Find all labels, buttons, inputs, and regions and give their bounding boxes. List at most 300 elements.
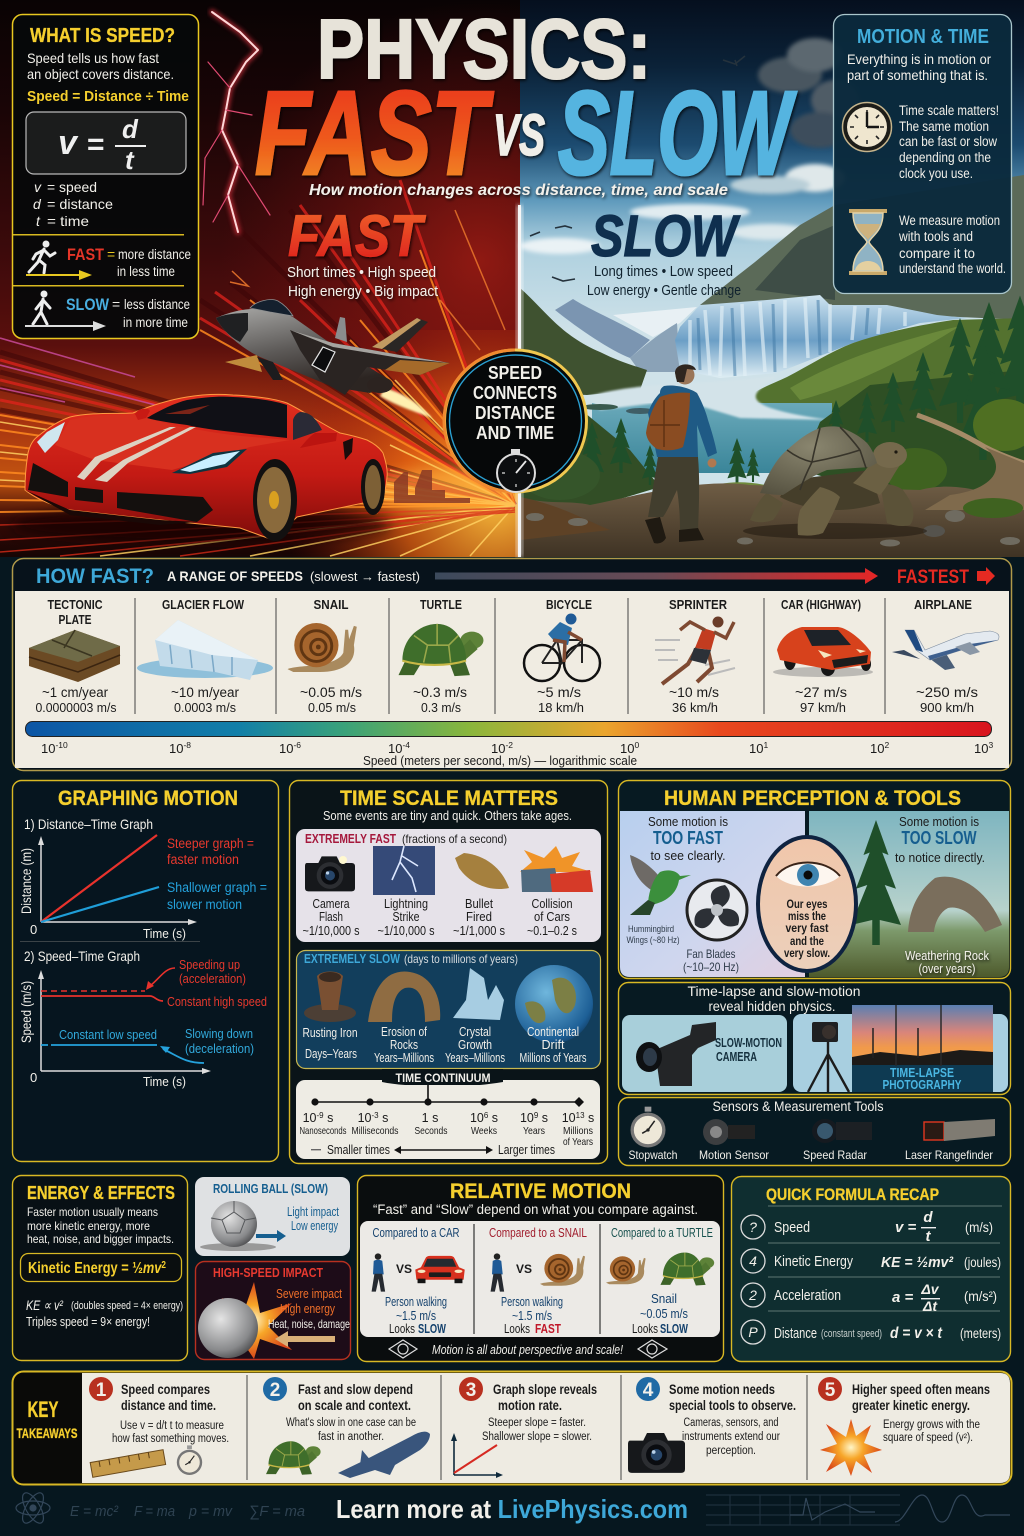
arrow <box>275 1331 335 1347</box>
icon: slow walker <box>25 290 106 331</box>
icon: earth <box>515 965 593 1043</box>
intro text: part of something that is. <box>847 67 988 83</box>
time labels: 10 <box>470 1111 484 1125</box>
divider line between fast and slow <box>516 205 523 557</box>
giant tortoise <box>743 426 927 539</box>
time labels: s <box>538 1111 548 1125</box>
time labels: s <box>379 1111 388 1125</box>
fast summary <box>287 204 438 300</box>
axis tick labels: 10 <box>974 741 988 756</box>
text: hidden physics <box>688 983 860 1014</box>
item: airplane: AIRPLANE <box>914 597 972 612</box>
row: distance: P <box>748 1324 758 1340</box>
row: acceleration: Acceleration <box>774 1287 841 1304</box>
measure text <box>898 213 1006 276</box>
item: tectonic plate: TECTONIC <box>48 597 103 612</box>
smaller to larger arrow: Larger times <box>498 1143 555 1157</box>
comparison: turtle: ~0.05 m/s <box>640 1307 688 1321</box>
row: kinetic energy: 4 <box>749 1253 757 1269</box>
sub-panel: too slow: to notice directly. <box>895 850 985 865</box>
hero illustration: fast side <box>0 0 520 557</box>
takeaway 4: 4 <box>643 1380 654 1401</box>
shell <box>760 426 877 495</box>
icon: collision <box>520 846 593 892</box>
time labels: -9 <box>317 1111 324 1120</box>
item: turtle: 0.3 m/s <box>421 700 461 715</box>
lightning bolt <box>203 12 270 232</box>
panel: time-lapse and slow-motion <box>618 982 1010 1094</box>
right forest <box>800 370 1024 500</box>
row: acceleration: (m/s²) <box>964 1289 997 1304</box>
comparison: car: Person walking <box>385 1295 447 1309</box>
icon: turtle <box>266 1441 321 1475</box>
title word: vs: VS <box>493 103 545 168</box>
item: bicycle: BICYCLE <box>546 597 592 612</box>
panel: how fast range of speeds: (slowest → fastest) <box>310 570 420 584</box>
item: car highway: 97 km/h <box>800 700 846 715</box>
row: acceleration <box>741 1281 997 1314</box>
heading: TIME SCALE MATTERS <box>340 787 558 810</box>
time scale text: clock you use. <box>899 166 973 181</box>
slow definition: SLOW <box>66 295 110 314</box>
title word: slow: SLOW <box>558 67 797 200</box>
arrow <box>256 1230 286 1242</box>
intro text <box>847 51 991 83</box>
row: distance <box>741 1320 1001 1344</box>
comparison: car: ~1.5 m/s <box>396 1309 436 1323</box>
hiker walking <box>645 364 717 543</box>
takeaway 4: Some motion needs <box>669 1382 775 1397</box>
sub-panel: time continuum: Weeks <box>471 1125 497 1137</box>
description: heat, noise, and bigger impacts. <box>27 1232 174 1246</box>
subheading: Some events are tiny and quick. Others take ages. <box>323 808 572 823</box>
comparison: snail <box>489 1225 587 1336</box>
card: slow-motion camera: SLOW-MOTION <box>715 1035 782 1050</box>
slow traits: Long times • Low speed <box>594 264 733 280</box>
note: constant high speed: Constant high speed <box>167 994 267 1009</box>
sub-panel: too fast: Fan Blades <box>686 947 736 961</box>
fast traits: Short times • High speed <box>287 265 436 281</box>
row: kinetic energy: KE = ½mv² <box>881 1254 954 1271</box>
time labels: 10 <box>303 1111 317 1125</box>
timeline <box>311 1085 584 1107</box>
item: glacier flow: ~10 m/year <box>171 685 239 700</box>
row: acceleration: 2 <box>748 1287 757 1303</box>
time scale text: can be fast or slow <box>899 134 997 149</box>
sub-panel: too fast: TOO FAST <box>653 828 723 848</box>
icon: stopwatch <box>497 449 535 492</box>
labels: Drift <box>542 1038 565 1052</box>
measure text: compare it to <box>899 246 975 261</box>
labels: Rusting Iron <box>302 1026 358 1040</box>
takeaway 2: Fast and slow depend <box>298 1382 413 1397</box>
takeaway 3: motion rate. <box>498 1398 562 1413</box>
note: constant low speed: Constant low speed <box>59 1027 157 1042</box>
comparison: snail: Compared to a SNAIL <box>489 1225 587 1240</box>
takeaway 5 <box>818 1377 990 1476</box>
row: distance: (meters) <box>960 1326 1001 1341</box>
chart: distance-time graph: Distance (m) <box>19 848 34 914</box>
panel: graphing motion <box>12 780 278 1162</box>
description: more kinetic energy, more <box>27 1219 150 1233</box>
variable legend: = speed <box>47 179 97 195</box>
far leg <box>880 483 913 526</box>
jet fighter <box>216 300 450 418</box>
axis tick labels: 10 <box>749 741 763 756</box>
tool: speed radar: Speed Radar <box>803 1148 867 1162</box>
row: speed: (m/s) <box>965 1220 993 1235</box>
axis tick labels <box>41 740 993 756</box>
row: distance: (constant speed) <box>821 1328 882 1340</box>
item: tectonic plate: PLATE <box>58 612 92 627</box>
sub-panel: extremely slow <box>296 950 600 1068</box>
takeaway 1: Use v = d/t t to measure <box>120 1420 224 1432</box>
item: airplane: ~250 m/s <box>916 685 978 700</box>
slow definition: less distance <box>124 297 190 312</box>
panel: time scale matters <box>290 780 608 1164</box>
comparison: turtle <box>606 1225 714 1336</box>
chart: distance-time graph: 0 <box>30 922 37 937</box>
icon: fast runner <box>26 240 92 280</box>
heading: TAKEAWAYS <box>16 1425 78 1441</box>
variable legend: = distance <box>47 196 113 212</box>
description: Faster motion usually means <box>27 1205 158 1219</box>
sub-panel: extremely fast <box>296 829 601 942</box>
note: shallower graph: slower motion <box>167 897 242 912</box>
proportionality note <box>26 1297 183 1329</box>
heading: RELATIVE MOTION <box>450 1180 631 1203</box>
sub-panel: extremely fast: EXTREMELY FAST <box>305 832 396 846</box>
comparison: car: Compared to a CAR <box>372 1225 460 1240</box>
sub-panel: too fast: Wings (~80 Hz) <box>626 935 680 946</box>
tool: stopwatch: Stopwatch <box>628 1148 678 1162</box>
card: time-lapse photography <box>793 1005 1008 1092</box>
icon: camera <box>628 1433 685 1473</box>
time scale text: The same motion <box>899 119 989 134</box>
birds <box>530 56 745 281</box>
slow definition: = <box>112 296 120 312</box>
icon: clock <box>842 102 892 152</box>
icon: crystal <box>453 968 504 1020</box>
time scale text <box>899 103 999 181</box>
subheading: A RANGE OF SPEEDS <box>167 568 303 584</box>
heading: KEY <box>28 1397 59 1422</box>
item: snail: ~0.05 m/s <box>300 685 362 700</box>
formula box: v <box>58 124 79 162</box>
takeaway 2 <box>263 1377 430 1478</box>
comparison: car: Looks <box>389 1322 415 1336</box>
takeaway 3: 3 <box>466 1380 476 1401</box>
axis tick labels: 10 <box>279 741 293 756</box>
takeaway 3: Shallower slope = slower. <box>482 1431 592 1443</box>
axis tick labels: 1 <box>763 740 768 750</box>
sub-panel: time continuum <box>296 1069 600 1159</box>
icon: burst <box>215 1282 292 1359</box>
intro text: Everything is in motion or <box>847 51 991 67</box>
takeaway 4: instruments extend our <box>682 1431 780 1443</box>
variable legend: = time <box>47 213 89 229</box>
takeaway 1: 1 <box>96 1380 107 1401</box>
variable legend: t <box>36 213 41 229</box>
icon: eye right <box>638 1340 667 1358</box>
row: speed: ? <box>749 1219 757 1235</box>
sub-panel: extremely fast: (fractions of a second) <box>402 832 507 846</box>
panel: quick formula recap <box>732 1176 1010 1362</box>
labels: ~1/1,000 s <box>453 924 505 938</box>
tool: motion sensor <box>699 1119 769 1162</box>
front leg <box>798 487 840 536</box>
icon: rusting iron <box>304 972 356 1022</box>
heading <box>16 1397 78 1441</box>
time labels <box>303 1111 594 1125</box>
eye callout text <box>784 897 830 960</box>
slow heading: SLOW <box>591 204 741 269</box>
takeaway 3 <box>451 1377 597 1478</box>
card: rolling ball slow <box>195 1177 350 1256</box>
sub-panel: too fast: Hummingbird <box>628 924 674 935</box>
icon: ruler <box>90 1450 166 1477</box>
smaller to larger arrow <box>311 1143 555 1157</box>
icon: hummingbird <box>630 855 691 915</box>
chart: speed-time graph: Time (s) <box>143 1074 186 1089</box>
labels: Rocks <box>390 1038 418 1052</box>
kinetic energy formula <box>20 1254 182 1282</box>
heading: WHAT IS SPEED? <box>30 25 175 47</box>
row: distance: Distance <box>774 1325 817 1342</box>
takeaway 4: special tools to observe. <box>669 1398 796 1413</box>
icon: starburst <box>820 1419 882 1476</box>
takeaway 5: Higher speed often means <box>852 1382 990 1397</box>
card: slow-motion camera <box>622 1015 787 1092</box>
labels: Fired <box>466 910 492 924</box>
fastest label: FASTEST <box>897 567 969 588</box>
labels: Collision <box>532 897 573 911</box>
item: tectonic plate: ~1 cm/year <box>42 685 108 700</box>
row: speed: v = <box>895 1219 917 1236</box>
takeaway 1 <box>89 1377 229 1477</box>
item: tectonic plate <box>29 597 120 715</box>
fast heading: FAST <box>288 204 426 269</box>
proportionality note: KE ∝ v² <box>26 1297 64 1313</box>
takeaway 5: Energy grows with the <box>883 1419 980 1431</box>
row: acceleration: a = <box>892 1289 914 1306</box>
item: sprinter: ~10 m/s <box>669 685 719 700</box>
icon: eye left <box>389 1340 417 1358</box>
labels: Lightning <box>384 897 428 911</box>
labels: ~1/10,000 s <box>378 924 434 938</box>
row: kinetic energy <box>741 1249 1001 1273</box>
eye callout text: and the <box>790 934 824 948</box>
continuum label: TIME CONTINUUM <box>396 1073 490 1085</box>
orange speed arrow <box>230 271 248 286</box>
subtitle: How motion changes across distance, time, and scale <box>309 182 728 199</box>
heading: QUICK FORMULA RECAP <box>766 1185 939 1204</box>
badge: speed connects distance and time <box>444 350 586 492</box>
sub-panel: time continuum: of Years <box>563 1136 593 1148</box>
icon: bullet <box>455 853 509 889</box>
axis tick labels: -8 <box>183 740 191 750</box>
fast definition: in less time <box>117 264 175 279</box>
time labels: 10 <box>562 1111 576 1125</box>
badge text: SPEED <box>488 363 542 383</box>
definition: an object covers distance. <box>27 66 174 82</box>
panel: energy and effects <box>12 1176 188 1360</box>
takeaway 4 <box>628 1377 796 1473</box>
axis tick labels: 10 <box>41 741 55 756</box>
takeaway 5: square of speed (v²). <box>883 1432 973 1444</box>
axis tick labels: 2 <box>884 740 889 750</box>
variable legend: v <box>34 179 42 195</box>
sub-panel: time continuum: Nanoseconds <box>300 1125 346 1137</box>
takeaway 3: Graph slope reveals <box>493 1382 597 1397</box>
badge text: CONNECTS <box>473 383 557 403</box>
labels: Millions of Years <box>520 1051 586 1065</box>
time labels: -3 <box>372 1111 379 1120</box>
labels: Growth <box>458 1038 492 1052</box>
labels: Days–Years <box>305 1047 357 1061</box>
row: speed: d <box>923 1209 933 1226</box>
subheading: “Fast” and “Slow” depend on what you compare against. <box>373 1202 698 1217</box>
card: rolling ball slow: Low energy <box>291 1219 339 1233</box>
heading: HUMAN PERCEPTION & TOOLS <box>664 787 961 810</box>
panel: key takeaways <box>12 1372 1012 1484</box>
axis tick labels: -10 <box>55 740 68 750</box>
axis tick labels: 10 <box>169 741 183 756</box>
item: airplane <box>892 597 999 715</box>
comparison: snail: Looks <box>504 1322 530 1336</box>
axis tick labels: 3 <box>988 740 993 750</box>
takeaway 2: What's slow in one case can be <box>286 1417 416 1429</box>
labels: ~0.1–0.2 s <box>527 924 577 938</box>
panel: how fast range of speeds <box>12 558 1012 770</box>
panel: what is speed <box>12 14 198 338</box>
distance-time graph title: 1) Distance–Time Graph <box>24 816 153 832</box>
item: glacier flow: GLACIER FLOW <box>162 597 245 612</box>
eye circle callout <box>758 837 856 971</box>
time labels: 10 <box>358 1111 372 1125</box>
takeaway 2: 2 <box>270 1380 280 1401</box>
labels: Camera <box>312 897 350 911</box>
sub-panel: extremely slow: (days to millions of years) <box>404 952 518 966</box>
sub-panel: time continuum: Years <box>523 1125 545 1137</box>
item: sprinter <box>655 597 735 715</box>
footer formulas: F = ma <box>134 1503 175 1520</box>
row: acceleration: Δt <box>922 1298 938 1314</box>
ground <box>520 483 1024 557</box>
slow definition: in more time <box>123 315 188 330</box>
takeaway 2: on scale and context. <box>298 1398 411 1413</box>
description <box>27 1205 174 1246</box>
axis tick labels: -4 <box>402 740 410 750</box>
chart: speed-time graph: Speed (m/s) <box>19 981 34 1043</box>
row: kinetic energy: (joules) <box>964 1255 1001 1270</box>
hero illustration: slow side <box>520 0 1024 557</box>
note: steeper graph: faster motion <box>167 852 239 867</box>
caption: Motion is all about perspective and scale! <box>432 1343 623 1357</box>
axis tick labels: 10 <box>491 741 505 756</box>
time labels: 10 <box>520 1111 534 1125</box>
rear leg <box>750 493 783 522</box>
note: speeding up: Speeding up <box>179 957 240 972</box>
sub-panel: too slow: (over years) <box>918 962 976 976</box>
logarithmic color bar <box>26 722 992 736</box>
speed-time graph title: 2) Speed–Time Graph <box>24 948 140 964</box>
proportionality note: Triples speed = 9× energy! <box>26 1315 150 1329</box>
item: glacier flow <box>137 597 273 715</box>
badge text: DISTANCE <box>475 403 555 423</box>
row: speed: t <box>926 1228 932 1245</box>
item: turtle: TURTLE <box>420 597 462 612</box>
comparison: car: VS <box>396 1262 412 1276</box>
item: airplane: 900 km/h <box>920 700 974 715</box>
labels: Flash <box>319 910 343 924</box>
time labels: s <box>488 1111 498 1125</box>
formula box <box>26 112 186 175</box>
neck and head <box>853 447 900 495</box>
comparison: turtle: Snail <box>651 1292 677 1306</box>
takeaway 1: Speed compares <box>121 1382 210 1397</box>
axis tick labels: 0 <box>634 740 639 750</box>
axis tick labels: 10 <box>870 741 884 756</box>
comparison: car: SLOW <box>418 1322 446 1336</box>
takeaway 5: greater kinetic energy. <box>852 1398 970 1413</box>
sub-panel: too slow: Weathering Rock <box>905 948 989 963</box>
sub-panel: extremely slow: EXTREMELY SLOW <box>304 952 400 966</box>
item: car highway <box>773 597 873 715</box>
labels: of Cars <box>534 910 570 924</box>
card: high-speed impact <box>196 1262 350 1360</box>
comparison: turtle: SLOW <box>660 1322 688 1336</box>
eye callout text: very fast <box>786 921 828 935</box>
axis tick labels: 10 <box>388 741 402 756</box>
proportionality note: (doubles speed = 4× energy) <box>71 1300 183 1312</box>
note: steeper graph: Steeper graph = <box>167 836 254 851</box>
tool: motion sensor: Motion Sensor <box>699 1148 769 1162</box>
takeaway 2: fast in another. <box>318 1431 384 1443</box>
axis tick labels: 10 <box>620 741 634 756</box>
item: bicycle <box>524 597 600 715</box>
eye callout text: miss the <box>788 909 826 923</box>
icon: hourglass <box>849 209 887 275</box>
footer formulas: E = mc² <box>70 1503 119 1520</box>
eye callout text: Our eyes <box>786 897 828 911</box>
card: rolling ball slow: Light impact <box>287 1205 339 1219</box>
note: slowing down: (deceleration) <box>185 1041 254 1056</box>
labels: Years–Millions <box>445 1051 505 1065</box>
sub-panel: too fast <box>620 811 805 977</box>
left forest <box>520 413 660 510</box>
labels: Years–Millions <box>374 1051 434 1065</box>
comparison: snail: FAST <box>535 1322 561 1336</box>
fast definition: FAST <box>67 245 105 264</box>
word formula: Speed = Distance ÷ Time <box>27 88 189 105</box>
icon: ball <box>200 1201 276 1251</box>
heading: ENERGY & EFFECTS <box>27 1183 175 1203</box>
card: slow-motion camera: CAMERA <box>716 1049 757 1064</box>
item: car highway: ~27 m/s <box>795 685 847 700</box>
note: shallower graph: Shallower graph = <box>167 880 267 895</box>
sub-panel: too slow: Some motion is <box>899 814 979 829</box>
item: turtle <box>398 597 483 715</box>
arrow: slowest to fastest <box>435 568 878 584</box>
heading: HOW FAST? <box>36 565 154 588</box>
tool: laser rangefinder: Laser Rangefinder <box>905 1148 993 1162</box>
footer formulas: ∑F = ma <box>249 1503 305 1520</box>
labels: Crystal <box>459 1025 491 1039</box>
sub-panel: too slow <box>809 811 1009 977</box>
item: snail: 0.05 m/s <box>308 700 356 715</box>
item: bicycle: 18 km/h <box>538 700 584 715</box>
